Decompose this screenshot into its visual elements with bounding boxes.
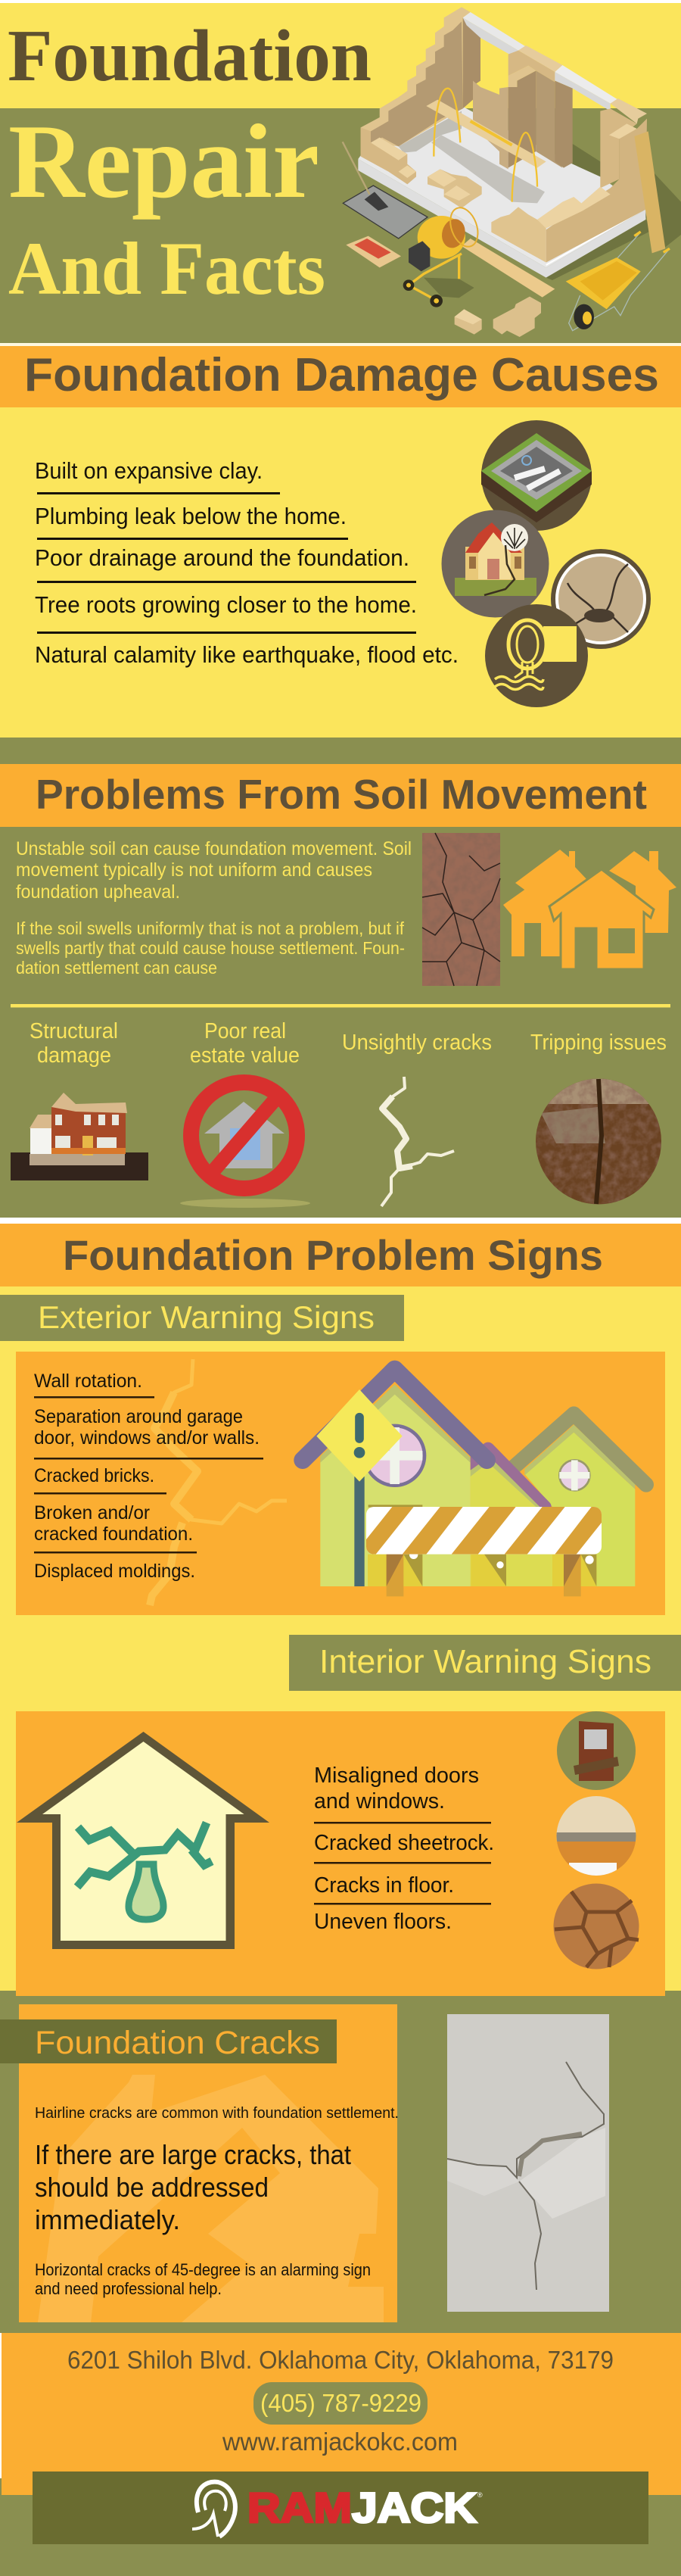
item: structural damage: damage	[37, 1043, 111, 1068]
item: structural damage	[11, 1019, 148, 1180]
item: tripping issues: Tripping issues	[530, 1031, 667, 1055]
exterior list	[34, 1371, 263, 1582]
heading: Foundation Problem Signs: Foundation Problem Signs	[63, 1231, 603, 1279]
interior list	[314, 1764, 494, 1934]
interior list: Misaligned doors	[314, 1764, 479, 1788]
phone pill	[253, 2382, 428, 2425]
subheading: Interior Warning Signs	[289, 1635, 681, 1691]
text block: soil movement explanation: foundation upheaval.	[16, 881, 180, 903]
text block: soil movement explanation: dation settlement can cause	[16, 958, 217, 978]
icon: cracked floor circle	[554, 1884, 639, 1969]
panel: interior warning signs	[16, 1711, 665, 1996]
text block: crack guidance: immediately.	[35, 2204, 180, 2235]
item: poor real estate value: Poor real	[204, 1019, 286, 1043]
exterior list: Broken and/or	[34, 1502, 150, 1523]
subheading: Interior Warning Signs: Interior Warning Signs	[319, 1643, 651, 1680]
interior list: Cracks in floor.	[314, 1873, 454, 1898]
text block: soil movement explanation: swells partly that could cause house settlement. Foun-	[16, 938, 405, 958]
panel: contact footer	[0, 2333, 681, 2495]
exterior list: Displaced moldings.	[34, 1561, 195, 1582]
subheading: Exterior Warning Signs	[0, 1295, 404, 1341]
icon: house with cracks and drip	[17, 1732, 269, 1949]
text block: crack guidance: Hairline cracks are common with foundation settlement.	[35, 2105, 399, 2122]
divider line	[11, 1004, 670, 1007]
item: poor real estate value: estate value	[190, 1043, 300, 1068]
text block: crack guidance: and need professional help.	[35, 2279, 222, 2298]
text block: crack guidance: If there are large cracks, that	[35, 2139, 351, 2170]
title: Foundation: Foundation	[8, 15, 372, 96]
item: unsightly cracks	[342, 1031, 492, 1206]
registered mark: ®	[477, 2491, 483, 2499]
exterior list: Separation around garage	[34, 1406, 243, 1427]
interior list: Uneven floors.	[314, 1910, 452, 1934]
cause list	[35, 457, 459, 668]
title: And Facts: And Facts	[8, 226, 325, 310]
panel: foundation damage causes	[0, 346, 681, 738]
cause list: Natural calamity like earthquake, flood etc.	[35, 641, 459, 668]
text block: soil movement explanation	[16, 838, 412, 978]
illustration: houses with warning sign and barrier	[303, 1369, 646, 1596]
exterior list: Cracked bricks.	[34, 1465, 154, 1486]
text block: soil movement explanation: Unstable soil can cause foundation movement. Soil	[16, 838, 412, 859]
icon: leaking pipe circle	[485, 604, 588, 707]
panel: foundation cracks	[0, 2004, 609, 2322]
divider band	[0, 1218, 681, 1224]
panel: header banner	[0, 0, 681, 346]
exterior list: cracked foundation.	[34, 1523, 193, 1545]
item: tripping issues	[530, 1031, 667, 1205]
panel: foundation problem signs	[0, 1224, 681, 1996]
interior list: Cracked sheetrock.	[314, 1831, 494, 1855]
icon: ground crack circle	[551, 549, 651, 649]
logo bar: Ram Jack	[33, 2472, 648, 2544]
panel: exterior warning signs	[16, 1352, 665, 1615]
cause list: Plumbing leak below the home.	[35, 503, 347, 529]
text block: soil movement explanation: If the soil swells uniformly that is not a problem, but if	[16, 918, 405, 938]
interior list: and windows.	[314, 1789, 445, 1813]
photo: cracked wall	[447, 2014, 609, 2312]
photo: cracked soil	[422, 833, 500, 986]
address: 6201 Shiloh Blvd. Oklahoma City, Oklahoma, 73179	[67, 2346, 614, 2374]
text block: crack guidance: should be addressed	[35, 2172, 269, 2203]
icon: cracked house circle	[442, 510, 549, 618]
phone pill: (405) 787-9229	[260, 2389, 421, 2417]
subheading: Foundation Cracks	[0, 2019, 337, 2063]
logo text: JACK: JACK	[352, 2484, 477, 2531]
website: www.ramjackokc.com	[222, 2428, 458, 2456]
icon: cracked sheetrock circle	[556, 1796, 636, 1876]
illustration: house under construction	[343, 7, 681, 337]
item: unsightly cracks: Unsightly cracks	[342, 1031, 492, 1055]
cause list: Poor drainage around the foundation.	[35, 544, 409, 571]
cause list: Built on expansive clay.	[35, 457, 263, 484]
item: structural damage: Structural	[30, 1019, 118, 1043]
icon: broken door circle	[557, 1711, 636, 1790]
icon: buried pipes circle	[481, 420, 592, 531]
exterior list: door, windows and/or walls.	[34, 1427, 260, 1449]
panel: problems from soil movement	[0, 764, 681, 1208]
icon: ram head	[192, 2482, 235, 2537]
title: Repair: Repair	[8, 103, 319, 220]
cause list: Tree roots growing closer to the home.	[35, 591, 417, 618]
subheading: Exterior Warning Signs: Exterior Warning Signs	[38, 1299, 375, 1335]
logo text: RAM: RAM	[247, 2484, 352, 2531]
heading: Problems From Soil Movement: Problems From Soil Movement	[36, 771, 647, 818]
watermark house	[38, 2075, 384, 2322]
subheading: Foundation Cracks: Foundation Cracks	[35, 2025, 320, 2061]
text block: crack guidance: Horizontal cracks of 45-degree is an alarming sign	[35, 2260, 371, 2279]
icon: orange houses	[503, 850, 676, 969]
text block: crack guidance	[35, 2105, 399, 2298]
text block: soil movement explanation: movement typically is not uniform and causes	[16, 859, 372, 881]
heading: Foundation Damage Causes: Foundation Damage Causes	[24, 349, 659, 401]
item: poor real estate value	[180, 1019, 310, 1208]
exterior list: Wall rotation.	[34, 1371, 142, 1392]
